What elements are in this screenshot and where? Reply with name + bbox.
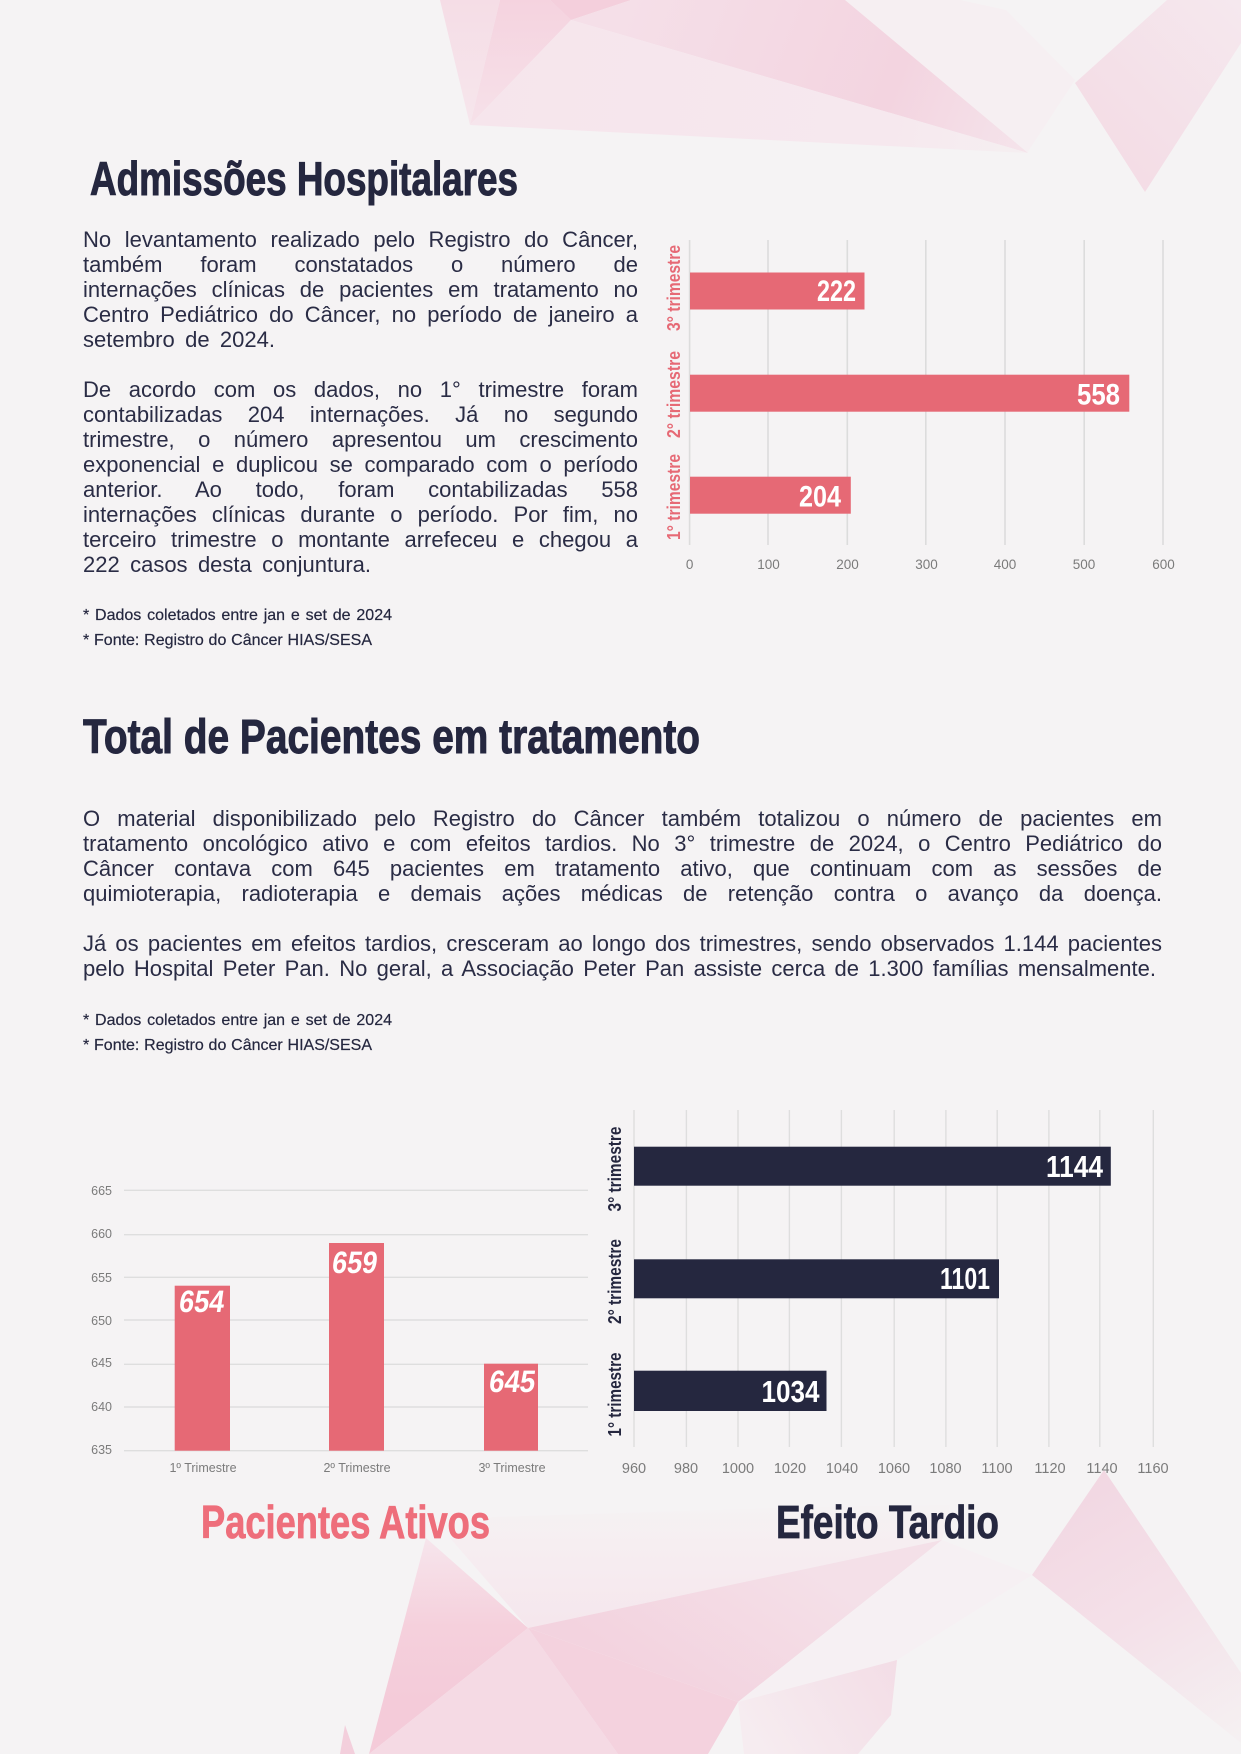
category labels (664, 245, 684, 540)
bar: 1º trimestre 204 (690, 477, 851, 514)
heading: Total de Pacientes em tratamento: Total de Pacientes em tratamento (83, 711, 700, 764)
text block: admissões: 222 casos desta conjuntura. (83, 552, 371, 577)
axis labels: 1080 (929, 1461, 962, 1477)
axis labels (622, 1461, 1169, 1477)
bar: 2º trimestre 659 (329, 1243, 384, 1451)
text block: admissões: trimestre, o número apresentou um crescimento (83, 427, 638, 452)
y axis labels: 640 (91, 1400, 112, 1414)
axis labels: 0 (686, 557, 693, 572)
y axis labels: 635 (91, 1443, 112, 1457)
text block: total de pacientes: O material disponibilizado pelo Registro do Câncer também totalizou o número de pacientes em (83, 806, 1162, 831)
axis labels (686, 557, 1175, 572)
text block: admissões: também foram constatados o número de (83, 252, 638, 277)
axis labels: 960 (622, 1461, 646, 1477)
text block: admissões: setembro de 2024. (83, 327, 275, 352)
text block: admissões: De acordo com os dados, no 1° trimestre foram (83, 377, 638, 402)
axis labels: 300 (915, 557, 938, 572)
background: bottom polygons (340, 1470, 1241, 1754)
category labels: 3° trimestre (664, 245, 684, 331)
background: top polygons (440, 0, 1241, 192)
category labels: 2° trimestre (664, 351, 684, 438)
bar: 2º trimestre 558: 558 (1077, 378, 1120, 412)
text block: admissões: exponencial e duplicou se comparado com o período (83, 452, 638, 477)
x axis labels: 2º Trimestre (323, 1461, 391, 1475)
text block: total de pacientes: quimioterapia, radioterapia e demais ações médicas de retenção contra o avanço da doença. (83, 881, 1162, 906)
footnotes: total de pacientes: * Fonte: Registro do Câncer HIAS/SESA (83, 1037, 372, 1054)
text block: admissões: contabilizadas 204 internações. Já no segundo (83, 402, 638, 427)
category labels: 1° trimestre (605, 1352, 625, 1436)
footnotes: admissões (83, 607, 392, 649)
chart title: Pacientes Ativos: Pacientes Ativos (201, 1496, 490, 1548)
text block: admissões: internações clínicas durante o período. Por fim, no (83, 502, 638, 527)
axis labels: 1020 (774, 1461, 806, 1477)
bar: 3º trimestre 1144 (634, 1147, 1111, 1186)
y axis labels: 655 (91, 1271, 112, 1285)
chart title: Efeito Tardio: Efeito Tardio (776, 1496, 999, 1548)
bar: 3º trimestre 222 (690, 272, 864, 310)
y axis labels (91, 1184, 112, 1457)
text block: total de pacientes: Câncer contava com 645 pacientes em tratamento ativo, que continuam com as sessões de (83, 856, 1162, 881)
footnotes: admissões: * Fonte: Registro do Câncer HIAS/SESA (83, 632, 372, 649)
axis labels: 980 (674, 1461, 698, 1477)
text block: admissões: terceiro trimestre o montante arrefeceu e chegou a (83, 527, 638, 552)
text block: total de pacientes (83, 806, 1162, 981)
axis labels: 1160 (1137, 1461, 1169, 1477)
bar: 2º trimestre 1101 (634, 1259, 999, 1298)
bar: 1º trimestre 654: 654 (177, 1284, 227, 1319)
chart: efeito tardio (605, 1110, 1169, 1477)
text block: total de pacientes: pelo Hospital Peter Pan. No geral, a Associação Peter Pan assiste cerca de 1.300 famílias mensalmente. (83, 956, 1156, 981)
x axis labels (169, 1461, 546, 1475)
category labels: 3° trimestre (605, 1126, 625, 1212)
y axis labels: 660 (91, 1227, 112, 1241)
footnotes: total de pacientes: * Dados coletados entre jan e set de 2024 (83, 1012, 392, 1029)
y axis labels: 650 (91, 1314, 112, 1328)
footnotes: admissões: * Dados coletados entre jan e set de 2024 (83, 607, 392, 624)
x axis labels: 3º Trimestre (478, 1461, 546, 1475)
axis labels: 500 (1073, 557, 1095, 572)
chart: pacientes ativos (91, 1184, 588, 1475)
y axis labels: 665 (91, 1184, 112, 1198)
y axis labels: 645 (91, 1356, 112, 1370)
text block: admissões (83, 227, 638, 577)
bar: 3º trimestre 645: 645 (487, 1364, 538, 1399)
axis labels: 1100 (981, 1461, 1013, 1477)
text block: total de pacientes: Já os pacientes em efeitos tardios, cresceram ao longo dos trimestres, sendo observados 1.144 pacientes (83, 931, 1162, 956)
category labels: 1° trimestre (664, 454, 684, 540)
bar: 1º trimestre 654 (175, 1284, 230, 1451)
text block: admissões: No levantamento realizado pelo Registro do Câncer, (83, 227, 638, 252)
axis labels: 400 (994, 557, 1016, 572)
axis labels: 1120 (1034, 1461, 1066, 1477)
bar: 2º trimestre 558 (690, 375, 1129, 412)
text block: admissões: anterior. Ao todo, foram contabilizadas 558 (83, 477, 638, 502)
axis labels: 1000 (722, 1461, 754, 1477)
footnotes: total de pacientes (83, 1012, 392, 1054)
axis labels: 1060 (878, 1461, 910, 1477)
axis labels: 1140 (1086, 1461, 1118, 1477)
category labels: 2° trimestre (605, 1239, 625, 1324)
heading: Admissões Hospitalares: Admissões Hospitalares (90, 152, 518, 205)
axis labels: 200 (836, 557, 859, 572)
bar: 1º trimestre 1034: 1034 (762, 1374, 820, 1409)
text block: admissões: internações clínicas de pacientes em tratamento no (83, 277, 638, 302)
text block: total de pacientes: tratamento oncológico ativo e com efeitos tardios. No 3° trimestre de 2024, o Centro Pediátrico do (83, 831, 1162, 856)
bar: 3º trimestre 1144: 1144 (1046, 1149, 1104, 1184)
axis labels: 1040 (826, 1461, 858, 1477)
bar: 1º trimestre 1034 (634, 1371, 826, 1411)
bar: 2º trimestre 659: 659 (330, 1245, 380, 1280)
bar: 3º trimestre 222: 222 (817, 275, 856, 308)
bar: 3º trimestre 645 (484, 1364, 538, 1451)
category labels (605, 1126, 625, 1436)
x axis labels: 1º Trimestre (169, 1461, 237, 1475)
axis labels: 100 (757, 557, 780, 572)
axis labels: 600 (1152, 557, 1175, 572)
bar: 2º trimestre 1101: 1101 (940, 1261, 990, 1296)
chart: admissões por trimestre (664, 240, 1175, 572)
text block: admissões: Centro Pediátrico do Câncer, no período de janeiro a (83, 302, 638, 327)
bar: 1º trimestre 204: 204 (799, 480, 841, 514)
